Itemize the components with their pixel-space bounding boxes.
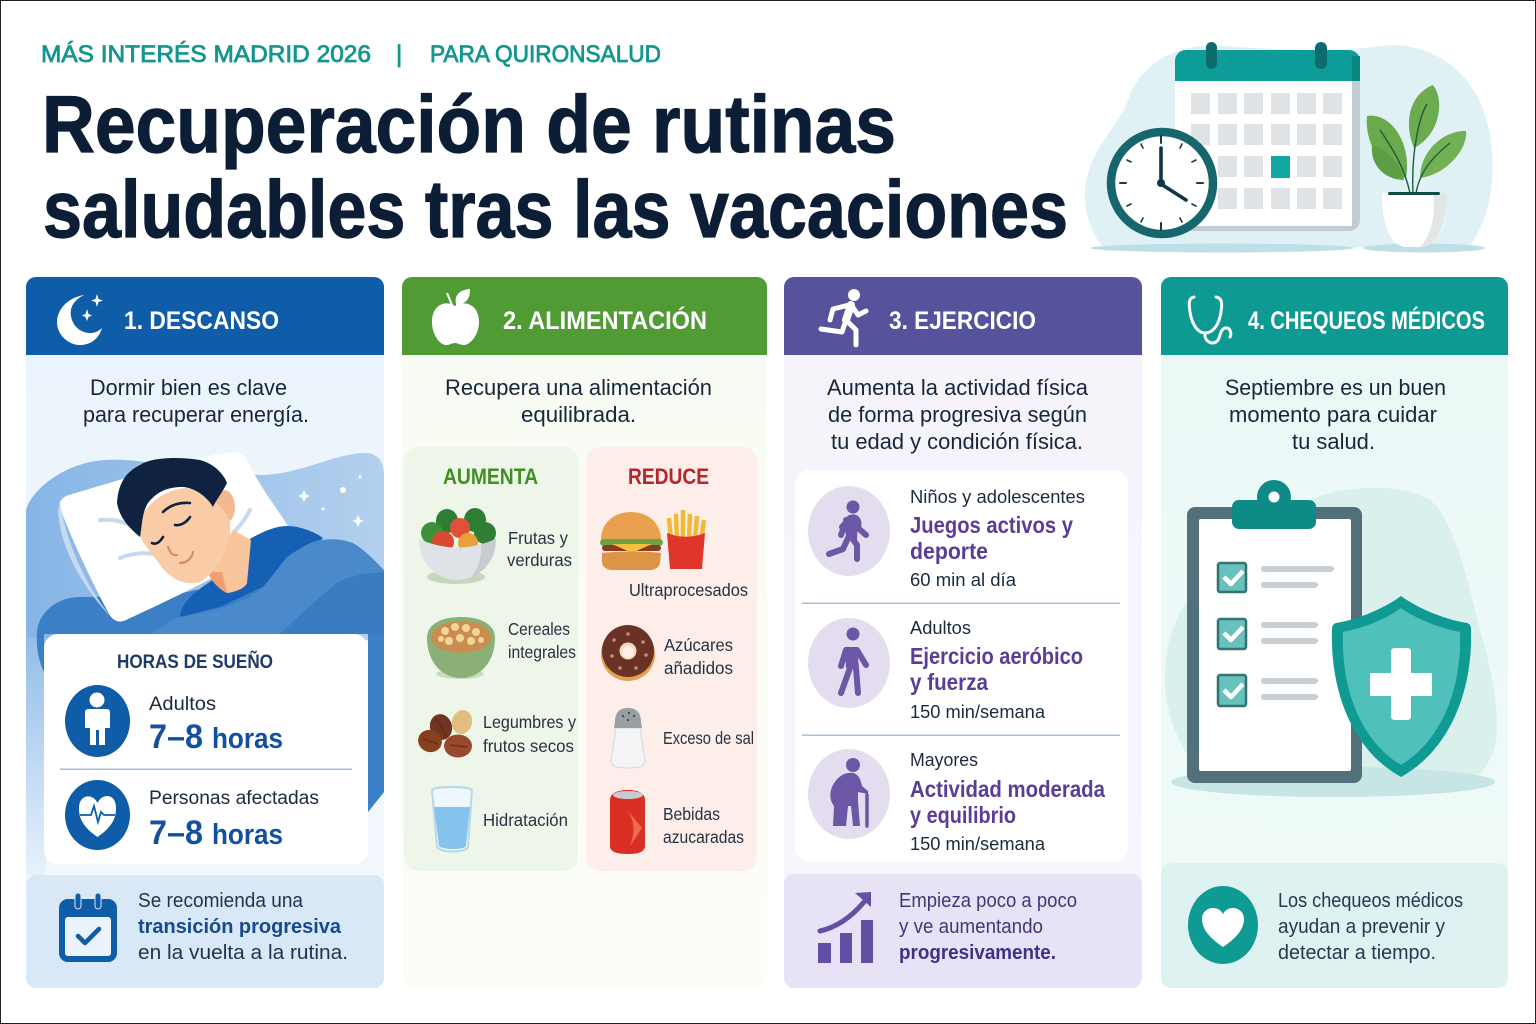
intro text: chequeos: Septiembre es un buen — [1225, 375, 1446, 400]
neck — [212, 530, 251, 593]
section header: descanso: 1. DESCANSO — [124, 307, 279, 335]
hero illustration: calendar, clock and plant — [1085, 42, 1493, 252]
icon: cereal bowl — [427, 617, 495, 679]
section header: chequeos médicos: 4. CHEQUEOS MÉDICOS — [1248, 306, 1485, 335]
illustration: person sleeping — [26, 452, 384, 875]
section header: chequeos médicos — [1161, 277, 1508, 355]
group: adultos: 150 min/semana — [910, 702, 1046, 722]
intro text: ejercicio — [827, 375, 1089, 454]
intro text: ejercicio: tu edad y condición física. — [831, 429, 1083, 454]
callout: transición progresiva — [26, 875, 384, 988]
group: adultos — [808, 618, 1083, 722]
group: niños y adolescentes: Juegos activos y — [910, 512, 1073, 538]
face — [138, 488, 230, 583]
callout: chequeos ayudan: detectar a tiempo. — [1278, 942, 1436, 964]
callout: transición progresiva: Se recomienda una — [138, 890, 304, 912]
group: niños y adolescentes: 60 min al día — [910, 570, 1017, 590]
column: reduce: Azúcares — [664, 635, 733, 655]
intro text: chequeos — [1225, 375, 1446, 454]
section header: ejercicio: 3. EJERCICIO — [889, 307, 1036, 335]
section header: alimentación: 2. ALIMENTACIÓN — [503, 305, 707, 335]
group: adultos: Adultos — [910, 618, 971, 638]
group: niños y adolescentes: Niños y adolescentes — [910, 487, 1085, 507]
column: reduce: Bebidas — [663, 804, 720, 824]
section header: alimentación — [402, 277, 767, 355]
icon: plant in pot — [1367, 85, 1466, 247]
group: adultos: Ejercicio aeróbico — [910, 643, 1083, 669]
icon: salad bowl — [419, 508, 496, 584]
intro text: ejercicio: Aumenta la actividad física — [827, 375, 1089, 400]
callout: empieza poco a poco: Empieza poco a poco — [899, 890, 1077, 912]
clipboard — [1187, 480, 1362, 783]
icon: calendar check — [59, 893, 117, 962]
shield with cross — [1332, 596, 1471, 777]
group: mayores: 150 min/semana — [910, 834, 1046, 854]
section header: descanso — [26, 277, 384, 355]
title: Recuperación de rutinas — [42, 80, 896, 170]
column: aumenta: Hidratación — [483, 810, 568, 830]
intro text: descanso: para recuperar energía. — [83, 402, 309, 427]
callout: empieza poco a poco: y ve aumentando — [899, 916, 1043, 938]
group: niños y adolescentes — [808, 486, 1085, 590]
column: reduce: Exceso de sal — [663, 728, 754, 748]
icon: heart — [1188, 886, 1258, 964]
intro text: alimentación: equilibrada. — [521, 402, 636, 427]
column: reduce: azucaradas — [663, 827, 744, 847]
callout: empieza poco a poco — [784, 874, 1142, 988]
icon: adult person — [65, 685, 130, 757]
stars — [298, 476, 364, 527]
group: mayores: Mayores — [910, 750, 978, 770]
intro text: chequeos: tu salud. — [1292, 429, 1375, 454]
panel: descanso — [26, 277, 384, 988]
intro text: alimentación — [445, 375, 712, 427]
shirt — [180, 526, 323, 617]
column: aumenta: AUMENTA — [443, 464, 538, 489]
callout: chequeos ayudan — [1161, 863, 1508, 988]
column: aumenta: Legumbres y — [483, 712, 576, 732]
title: saludables tras las vacaciones — [43, 165, 1068, 255]
card: actividad por edades — [795, 470, 1128, 862]
card: horas de sueño: 7–8 — [149, 718, 203, 756]
column: aumenta: Frutas y — [508, 528, 568, 548]
section header: ejercicio — [784, 277, 1142, 355]
header tagline: PARA QUIRONSALUD — [430, 41, 661, 68]
intro text: descanso: Dormir bien es clave — [90, 375, 287, 400]
panel: alimentación — [402, 277, 767, 988]
column: reduce: añadidos — [664, 658, 733, 678]
card: horas de sueño: HORAS DE SUEÑO — [117, 651, 273, 673]
card: horas de sueño: 7–8 — [149, 814, 203, 852]
intro text: alimentación: Recupera una alimentación — [445, 375, 712, 400]
illustration: clipboard and shield — [1165, 480, 1497, 797]
group: mayores: Actividad moderada — [910, 776, 1105, 802]
column: aumenta: Cereales — [508, 619, 570, 639]
icon: heart with pulse — [65, 780, 130, 850]
card: horas de sueño: Adultos — [149, 694, 216, 715]
intro text: ejercicio: de forma progresiva según — [828, 402, 1087, 427]
column: aumenta — [404, 447, 578, 871]
callout: transición progresiva: transición progresiva — [138, 916, 342, 938]
blanket — [150, 539, 384, 634]
icon: donut — [601, 625, 655, 681]
column: reduce: Ultraprocesados — [629, 580, 748, 600]
icon: rising bar chart — [818, 892, 873, 963]
icon: calendar — [1175, 42, 1360, 231]
group: adultos: y fuerza — [910, 669, 988, 695]
group: mayores: y equilibrio — [910, 802, 1016, 828]
icon: glass of water — [432, 787, 472, 852]
icon: salt shaker — [611, 708, 645, 768]
column: aumenta: frutos secos — [483, 736, 574, 756]
icon: legumes and nuts — [415, 708, 475, 758]
callout: transición progresiva: en la vuelta a la rutina. — [138, 942, 348, 964]
intro text: descanso — [83, 375, 309, 427]
icon: clock — [1111, 132, 1213, 234]
intro text: chequeos: momento para cuidar — [1229, 402, 1437, 427]
card: horas de sueño: horas — [212, 723, 283, 755]
icon: soda can — [610, 790, 645, 854]
card: horas de sueño — [44, 634, 368, 864]
title — [42, 80, 1068, 255]
callout: chequeos ayudan: Los chequeos médicos — [1278, 890, 1463, 912]
panel: ejercicio — [784, 277, 1142, 988]
header tagline: MÁS INTERÉS MADRID 2026 — [41, 41, 371, 68]
header tagline — [41, 41, 661, 68]
column: reduce — [586, 447, 757, 871]
closed eyes — [152, 503, 190, 544]
group: mayores — [808, 749, 1105, 854]
hair — [117, 458, 227, 537]
header tagline: | — [396, 41, 402, 68]
callout: chequeos ayudan: ayudan a prevenir y — [1278, 916, 1445, 938]
column: aumenta: verduras — [507, 550, 572, 570]
card: horas de sueño: Personas afectadas — [149, 788, 319, 809]
ear — [216, 490, 235, 521]
column: reduce: REDUCE — [628, 464, 709, 489]
icon: burger and fries — [600, 510, 705, 570]
card: horas de sueño: horas — [212, 819, 283, 851]
column: aumenta: integrales — [508, 642, 576, 662]
group: niños y adolescentes: deporte — [910, 538, 988, 564]
pillow — [60, 452, 288, 622]
callout: empieza poco a poco: progresivamente. — [899, 942, 1056, 964]
panel: chequeos médicos — [1161, 277, 1508, 988]
